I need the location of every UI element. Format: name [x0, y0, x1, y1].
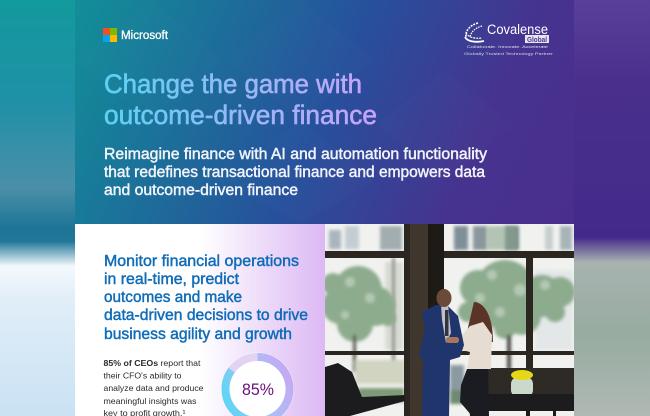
subtitle: Reimagine finance with AI and automation functionality [104, 146, 487, 163]
logo: Covalense Global: Covalense [487, 22, 548, 37]
sofa [488, 368, 574, 394]
logo: Microsoft [103, 28, 169, 42]
trees [322, 226, 575, 404]
body text: analyze data and produce [104, 383, 204, 393]
title [104, 69, 377, 130]
buildings behind [329, 226, 573, 368]
title: outcome-driven finance [104, 100, 377, 130]
photo: business handshake in lobby [322, 224, 575, 416]
heading: in real-time, predict [104, 271, 240, 288]
logo: Microsoft: Microsoft [121, 30, 169, 42]
left chair [325, 363, 405, 416]
logo: Covalense Global: Global [527, 37, 547, 44]
logo: Covalense Global: Globally Trusted Technology Partner [464, 51, 554, 56]
donut chart: 85%: 85% [242, 381, 274, 399]
subtitle [104, 146, 487, 199]
blurred left backdrop [0, 0, 75, 416]
man [419, 289, 464, 416]
heading: outcomes and make [104, 289, 242, 306]
body text [104, 358, 204, 416]
panel: financial operations [75, 224, 325, 416]
body text: 85% of CEOs report that [104, 358, 201, 368]
body text: meaningful insights was [104, 396, 196, 406]
flower vase [511, 370, 533, 394]
table [468, 394, 574, 416]
body text: their CFO's ability to [104, 370, 182, 380]
logo: Covalense Global [464, 22, 554, 56]
woman [460, 302, 493, 416]
heading: business agility and growth [104, 326, 292, 343]
title: Change the game with [104, 69, 362, 99]
heading: data-driven decisions to drive [104, 307, 308, 324]
heading [104, 253, 308, 343]
logo: Covalense Global: Collaborate. Innovate. Accelerate [467, 44, 549, 49]
subtitle: and outcome-driven finance [104, 182, 298, 199]
header panel [75, 0, 574, 224]
heading: Monitor financial operations [104, 253, 299, 270]
donut chart: 85% [221, 352, 294, 416]
window frames [325, 224, 574, 416]
subtitle: that redefines transactional finance and empowers data [104, 164, 485, 181]
icon: Covalense swirl [465, 23, 484, 42]
blurred right backdrop [574, 0, 650, 416]
